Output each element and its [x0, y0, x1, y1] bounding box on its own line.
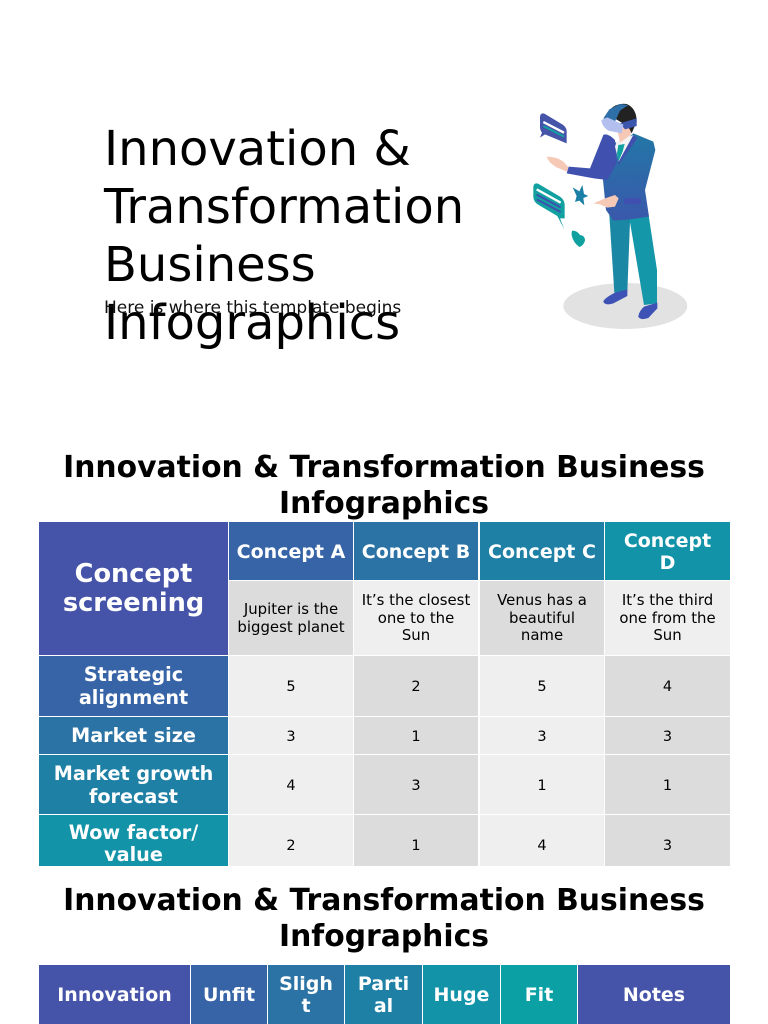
heading: second table — [63, 883, 705, 954]
column header: concept D: D — [660, 552, 675, 574]
heading: second table: Infographics — [279, 919, 489, 954]
row label: market size: Market size — [71, 724, 196, 747]
row label: wow factor — [39, 815, 228, 875]
table: concept screening: 3 — [411, 778, 421, 794]
column: partial: Parti — [358, 973, 409, 995]
column: innovation: Innovation — [57, 984, 172, 1006]
row: wow factor values: 2 — [286, 838, 296, 854]
icon: heart — [572, 231, 585, 247]
table: concept screening: 1 — [411, 728, 421, 744]
heading: first table: Innovation & Transformation Business — [63, 450, 705, 485]
heading: second table: Innovation & Transformation Business — [63, 883, 705, 918]
description: concept D: It’s the third — [622, 591, 713, 609]
description: concept A: biggest planet — [237, 618, 345, 636]
heading: first table: Infographics — [279, 486, 489, 521]
row label: market size — [39, 717, 228, 754]
title: Transformation — [104, 179, 464, 235]
column: huge — [423, 965, 500, 1024]
column header: concept C — [480, 522, 604, 580]
column header: concept D: Concept — [624, 530, 711, 552]
table: concept screening: 4 — [663, 679, 672, 695]
column: fit — [501, 965, 577, 1024]
description: concept B — [354, 581, 478, 655]
column: slight — [268, 965, 344, 1024]
row: market size values: 3 — [286, 728, 296, 744]
description: concept B: Sun — [402, 626, 430, 644]
column: partial — [345, 965, 422, 1024]
column: partial: al — [374, 995, 393, 1017]
heading: first table — [63, 450, 705, 521]
column header: concept B: Concept B — [362, 540, 470, 562]
icon: chat bubble teal — [533, 183, 565, 229]
column: unfit — [191, 965, 267, 1024]
legs — [609, 213, 657, 305]
description: concept C: Venus has a — [497, 591, 587, 609]
table: innovation header row — [39, 965, 730, 1024]
column: slight: Sligh — [279, 973, 333, 995]
column: notes — [578, 965, 730, 1024]
description: concept C: beautiful — [509, 609, 575, 627]
description: concept C — [480, 581, 604, 655]
description: concept A — [229, 581, 353, 655]
description: concept B: one to the — [378, 609, 454, 627]
row label: market growth forecast: forecast — [89, 784, 178, 808]
table: concept screening: 1 — [411, 838, 421, 854]
row label: wow factor: Wow factor/ — [69, 821, 198, 844]
title: Infographics — [104, 295, 400, 351]
row: strategic alignment values: 5 — [286, 679, 296, 695]
hands — [547, 157, 619, 208]
description: concept A: Jupiter is the — [244, 600, 338, 618]
column: fit: Fit — [525, 984, 553, 1006]
table: concept screening: 5 — [537, 679, 547, 695]
column: huge: Huge — [434, 984, 489, 1006]
description: concept D: one from the — [619, 609, 716, 627]
title — [104, 121, 464, 351]
icon: chat bubble blue — [540, 113, 567, 143]
illustration: man with VR headset — [533, 104, 688, 329]
column header: concept C: Concept C — [488, 540, 596, 562]
row: strategic alignment values — [229, 656, 353, 716]
header cell: concept screening: Concept — [75, 559, 192, 589]
row: market growth values — [229, 755, 353, 814]
row label: strategic alignment: alignment — [79, 686, 188, 709]
table: concept screening: 3 — [663, 728, 672, 744]
title: Innovation & — [104, 121, 411, 177]
column: notes: Notes — [623, 984, 685, 1006]
description: concept D — [605, 581, 730, 655]
row: market size values — [229, 717, 353, 754]
row label: market growth forecast — [39, 755, 228, 814]
description: concept D: Sun — [653, 626, 682, 644]
header cell: concept screening: screening — [63, 588, 204, 618]
column header: concept D — [605, 522, 730, 580]
table: concept screening: 3 — [663, 838, 672, 854]
title: Business — [104, 237, 316, 293]
column header: concept A — [229, 522, 353, 580]
row label: market growth forecast: Market growth — [54, 762, 213, 784]
table: concept screening: 1 — [663, 778, 672, 794]
pocket — [624, 198, 641, 204]
table: concept screening: 2 — [411, 679, 421, 695]
header cell: concept screening — [39, 522, 228, 655]
floor shadow — [563, 283, 687, 329]
table: concept screening: 3 — [537, 728, 547, 744]
description: concept B: It’s the closest — [362, 591, 470, 609]
column: unfit: Unfit — [203, 984, 255, 1006]
shoes — [603, 289, 657, 319]
table: concept screening: 4 — [537, 838, 547, 854]
icon: star — [573, 185, 588, 205]
jacket — [567, 133, 655, 221]
row label: wow factor: value — [104, 843, 163, 866]
subtitle: Here is where this template begins — [104, 298, 401, 318]
shirt and tie — [615, 135, 633, 162]
row: market growth values: 4 — [286, 778, 296, 794]
row label: strategic alignment — [39, 656, 228, 716]
column: innovation — [39, 965, 190, 1024]
column: slight: t — [301, 995, 311, 1017]
table: concept screening: 1 — [537, 778, 547, 794]
head — [601, 104, 637, 143]
row: wow factor values — [229, 815, 353, 875]
description: concept C: name — [521, 626, 563, 644]
row label: strategic alignment: Strategic — [84, 663, 183, 686]
column header: concept B — [354, 522, 478, 580]
column header: concept A: Concept A — [237, 540, 345, 562]
